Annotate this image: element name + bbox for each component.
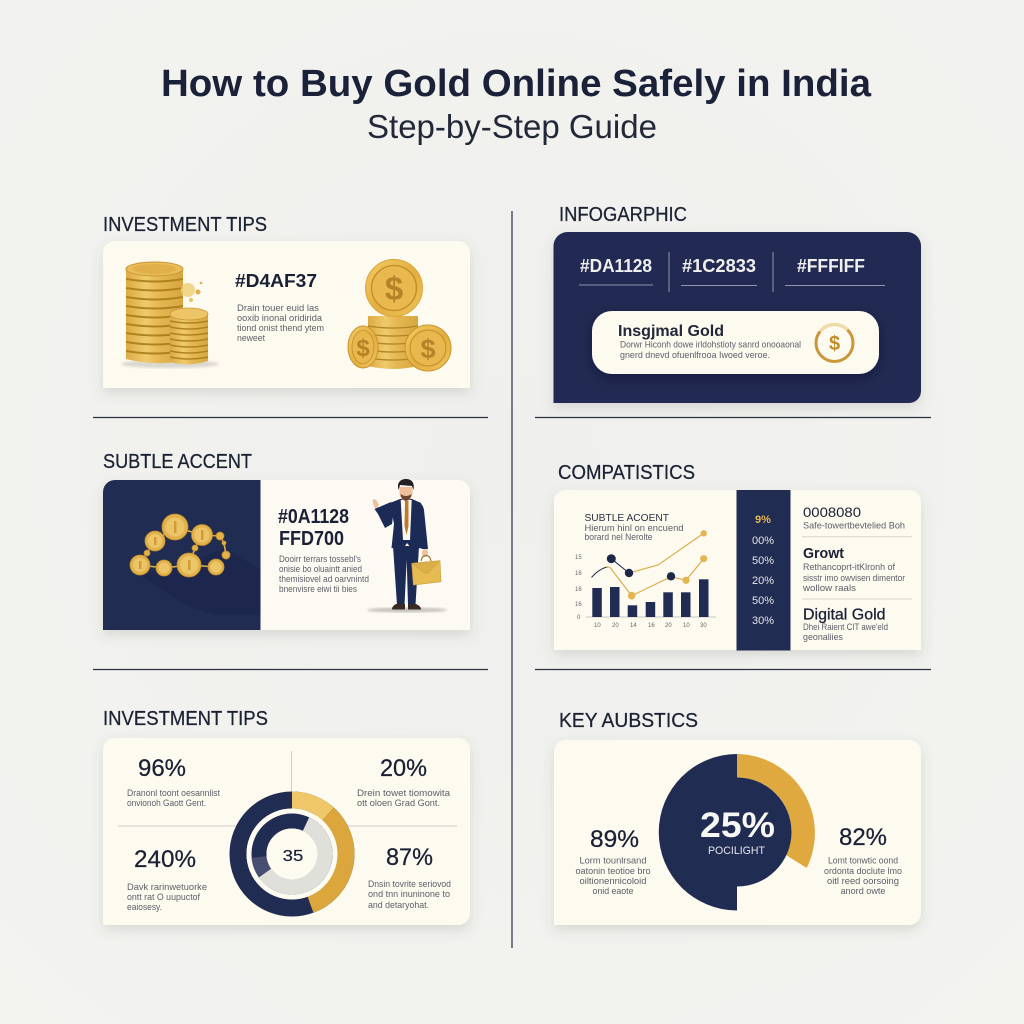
card background: [554, 490, 921, 650]
text block: ooxib inonal oridirida: [237, 313, 323, 324]
subtitle: Step-by-Step Guide: [367, 108, 657, 145]
stat list: Growt: [803, 545, 844, 562]
stat: 240%: eaiosesy.: [127, 902, 162, 913]
stat list: Rethancoprt-itKlronh of: [803, 562, 895, 573]
heading: infographic: INFOGARPHIC: [559, 204, 687, 226]
bar and line chart: 10: [683, 623, 690, 629]
navy percentage column: 20%: [752, 575, 774, 587]
stat: 89%: oiltionennicoloid: [580, 876, 646, 887]
donut chart: [238, 800, 346, 908]
icon: dollar coins pile: $: [385, 270, 403, 307]
callout pill: gold: [592, 311, 879, 374]
text block: onisie bo oluaintt anied: [279, 564, 362, 575]
stat: 20%: [357, 755, 451, 809]
pie chart: [659, 754, 815, 910]
navy side block: [103, 480, 260, 630]
callout pill: gold: gnerd dnevd ofuenlfrooa Iwoed veroe.: [620, 350, 770, 361]
icon: dollar coins pile: $: [356, 335, 370, 362]
stat: 89%: Lorm tounlrsand: [580, 856, 646, 866]
chart caption: SUBTLE ACOENT: [584, 512, 670, 524]
panel: key statistics: [554, 710, 921, 925]
stat: 240%: [127, 846, 207, 913]
bar and line chart: 30: [700, 623, 707, 629]
colour codes row: [579, 252, 885, 292]
stat list: geonaliies: [803, 632, 843, 643]
stat: 82%: ordonta doclute lmo: [824, 866, 902, 877]
bar and line chart: 16: [575, 587, 582, 593]
icon: dollar coins pile: $: [420, 334, 436, 364]
donut chart: 35: [283, 848, 303, 865]
bar and line chart: [575, 530, 716, 629]
stat: 82%: anord owte: [840, 886, 886, 897]
card background: [554, 740, 921, 925]
panel: subtle accent: [103, 451, 470, 630]
stat: 96%: onvionoh Gaott Gent.: [127, 798, 206, 809]
stat: 82%: [824, 824, 902, 897]
heading: compatistics: COMPATISTICS: [558, 462, 695, 484]
navy percentage column: 50%: [752, 595, 774, 607]
stat: 20%: Drein towet tiomowita: [357, 788, 451, 799]
card background: [103, 738, 470, 925]
chart caption: Hierum hinl on encuend: [584, 523, 684, 534]
label: colour codes: #0A1128: [278, 506, 349, 528]
label: #D4AF37: #D4AF37: [235, 271, 317, 291]
stat: 82%: 82%: [839, 824, 887, 851]
icon: dollar ring: [816, 324, 853, 362]
stat: 87%: and detaryohat.: [368, 900, 429, 911]
stat: 89%: onid eaote: [592, 886, 634, 897]
text block: tiond onist thend ytem: [237, 323, 324, 334]
heading: subtle accent: SUBTLE ACCENT: [103, 451, 252, 473]
stat: 87%: ond tnn inuninone to: [368, 889, 450, 900]
colour codes row: #1C2833: [682, 256, 756, 276]
stat: 240%: Davk rarinwetuorke: [127, 882, 207, 893]
stat: 20%: 20%: [380, 755, 427, 782]
stat: 89%: 89%: [590, 826, 639, 853]
stat: 240%: ontt rat O uupuctof: [127, 892, 200, 903]
text block: bnenvisre eiwi tii bies: [279, 584, 357, 595]
callout pill: gold: Dorwr Hiconh dowe irldohstioty sanrd onooaonal: [620, 340, 801, 350]
pie chart: POCILIGHT: [708, 845, 765, 857]
label: colour codes: FFD700: [279, 528, 344, 550]
heading: investment tips: INVESTMENT TIPS: [103, 708, 268, 730]
bar and line chart: 15: [575, 555, 582, 561]
bar and line chart: 16: [648, 623, 655, 629]
stat: 87%: Dnsin tovrite seriovod: [368, 879, 451, 890]
panel: investment tips coins: [103, 214, 470, 388]
chart caption: borard nel Nerolte: [584, 532, 652, 543]
stat: 82%: Lomt tonwtic oond: [828, 856, 898, 866]
bar and line chart: 14: [630, 623, 637, 629]
heading: key aubstics: KEY AUBSTICS: [559, 710, 698, 732]
stat: 96%: 96%: [138, 755, 186, 782]
stat list: sisstr imo owvisen dimentor: [803, 573, 905, 584]
icon: dollar ring: $: [829, 333, 840, 355]
navy percentage column: 50%: [752, 555, 774, 567]
stat list: [802, 504, 912, 643]
stat: 89%: [576, 826, 650, 897]
stat: 96%: Dranonl toont oesannlist: [127, 788, 220, 799]
callout pill: gold: Insgjmal Gold: [618, 323, 724, 340]
colour codes row: #DA1128: [580, 256, 652, 276]
stat: 20%: ott oloen Grad Gont.: [357, 798, 440, 809]
stat list: Digital Gold: [803, 606, 886, 624]
stat list: wollow raals: [802, 583, 856, 594]
navy percentage column: 30%: [752, 615, 774, 627]
title: How to Buy Gold Online Safely in India: [161, 63, 872, 105]
stat: 87%: 87%: [386, 844, 433, 871]
stat: 87%: [368, 844, 451, 911]
heading: investment tips: INVESTMENT TIPS: [103, 214, 267, 236]
icon: tall coin stacks: [121, 262, 219, 368]
label: colour codes: [278, 506, 349, 550]
colour codes row: #FFFIFF: [797, 256, 865, 276]
navy percentage column: 9%: [755, 514, 771, 526]
panel: infographic palette: [554, 204, 921, 403]
text block: themisiovel ad oarvnintd: [279, 574, 369, 585]
panel: investment tips donut: [103, 708, 470, 925]
stat: 89%: oatonin teotioe bro: [576, 866, 650, 877]
stat list: Safe-towertbevtelied Boh: [803, 520, 905, 532]
bar and line chart: 10: [594, 623, 601, 629]
card background: [103, 480, 470, 630]
bar and line chart: 20: [612, 623, 619, 629]
text block: [237, 303, 324, 344]
panel: chart and statistics: [554, 462, 921, 650]
icon: dollar coins pile: [348, 260, 451, 371]
bar and line chart: 16: [575, 602, 582, 608]
icon: businessman with briefcase: [367, 479, 447, 612]
bar and line chart: 20: [665, 623, 672, 629]
stat: 96%: [127, 755, 220, 809]
stat: 82%: oitl reed oorsoing: [827, 876, 899, 887]
navy percentage column: [736, 490, 790, 650]
card background: [554, 232, 921, 403]
bar and line chart: 16: [575, 571, 582, 577]
stat list: Dhei Raient CIT awe'eld: [803, 622, 888, 633]
text block: Drain touer euid las: [237, 303, 319, 314]
pie chart: 25%: [700, 806, 775, 845]
stat list: 0008080: [803, 504, 861, 520]
bar and line chart: 0: [577, 615, 581, 621]
text block: [279, 554, 369, 595]
chart caption: [584, 512, 684, 543]
icon: linked coin network: [130, 514, 260, 615]
navy percentage column: 00%: [752, 535, 774, 547]
text block: Dooirr terrars tossebl's: [279, 554, 361, 565]
text block: neweet: [237, 333, 265, 344]
stat: 240%: 240%: [134, 846, 196, 873]
card background: [103, 241, 470, 388]
